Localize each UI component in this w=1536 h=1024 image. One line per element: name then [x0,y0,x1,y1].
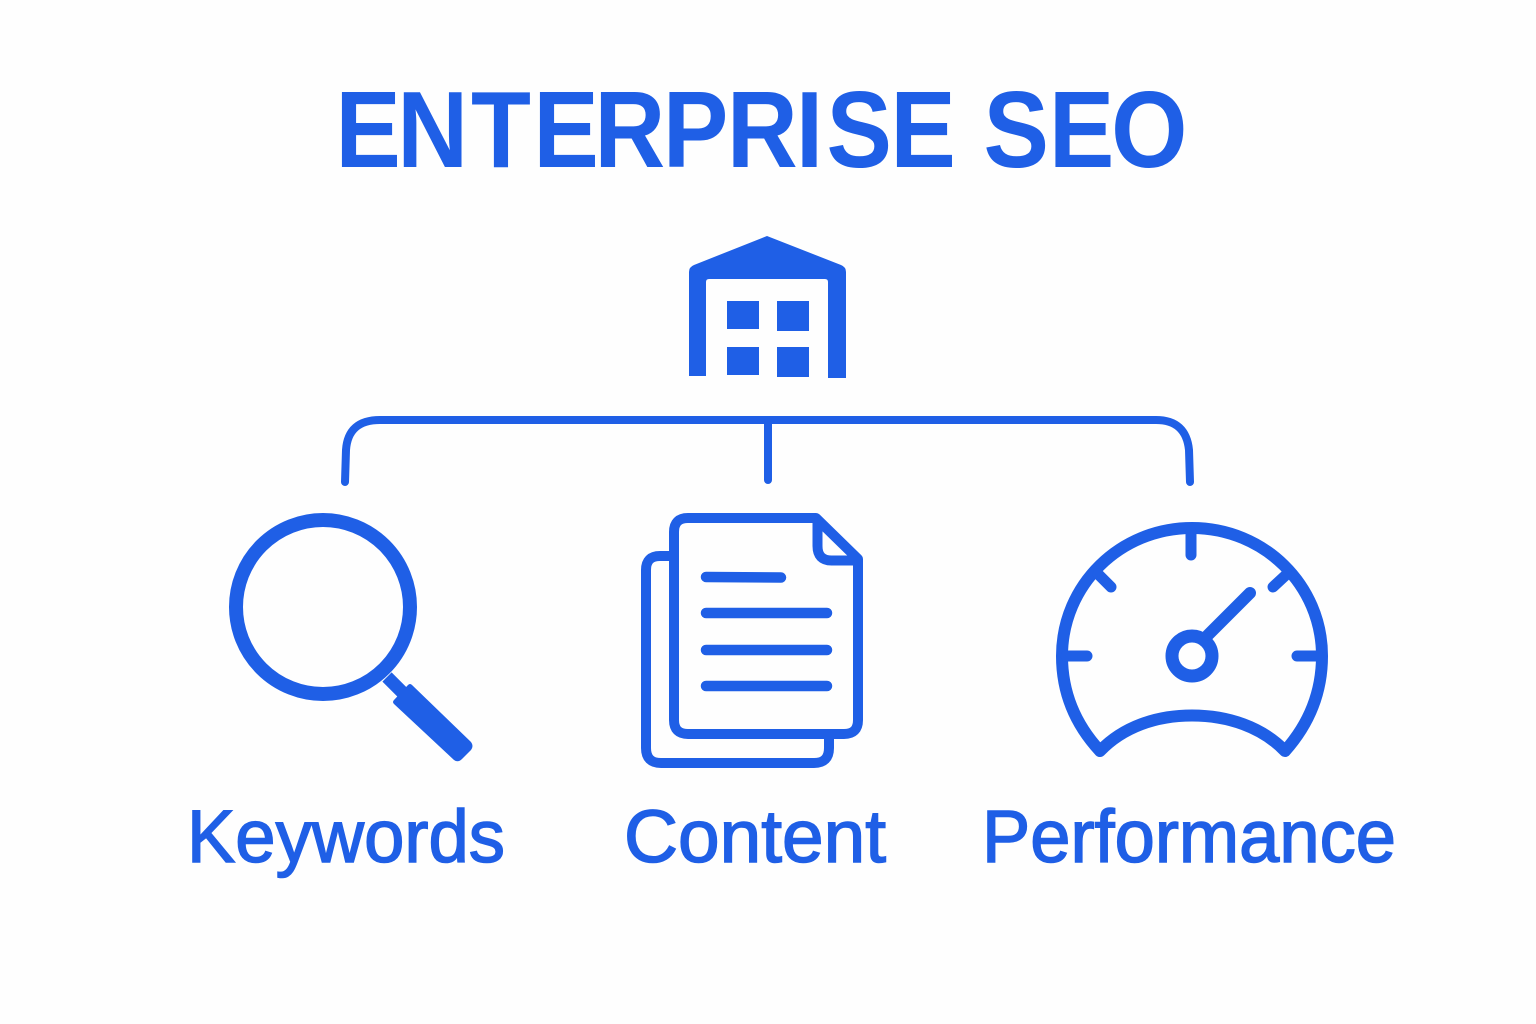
title: ENTERPRISE SEO [335,68,1187,190]
icon: warehouse building [689,236,846,378]
label: Keywords: Keywords [187,795,505,878]
icon: speedometer gauge [1062,528,1322,751]
connector: branching bracket [345,420,1190,482]
label: Content: Content [624,795,886,878]
label: Performance: Performance [982,795,1396,878]
icon: magnifying glass [236,520,472,761]
icon: documents [646,518,858,763]
